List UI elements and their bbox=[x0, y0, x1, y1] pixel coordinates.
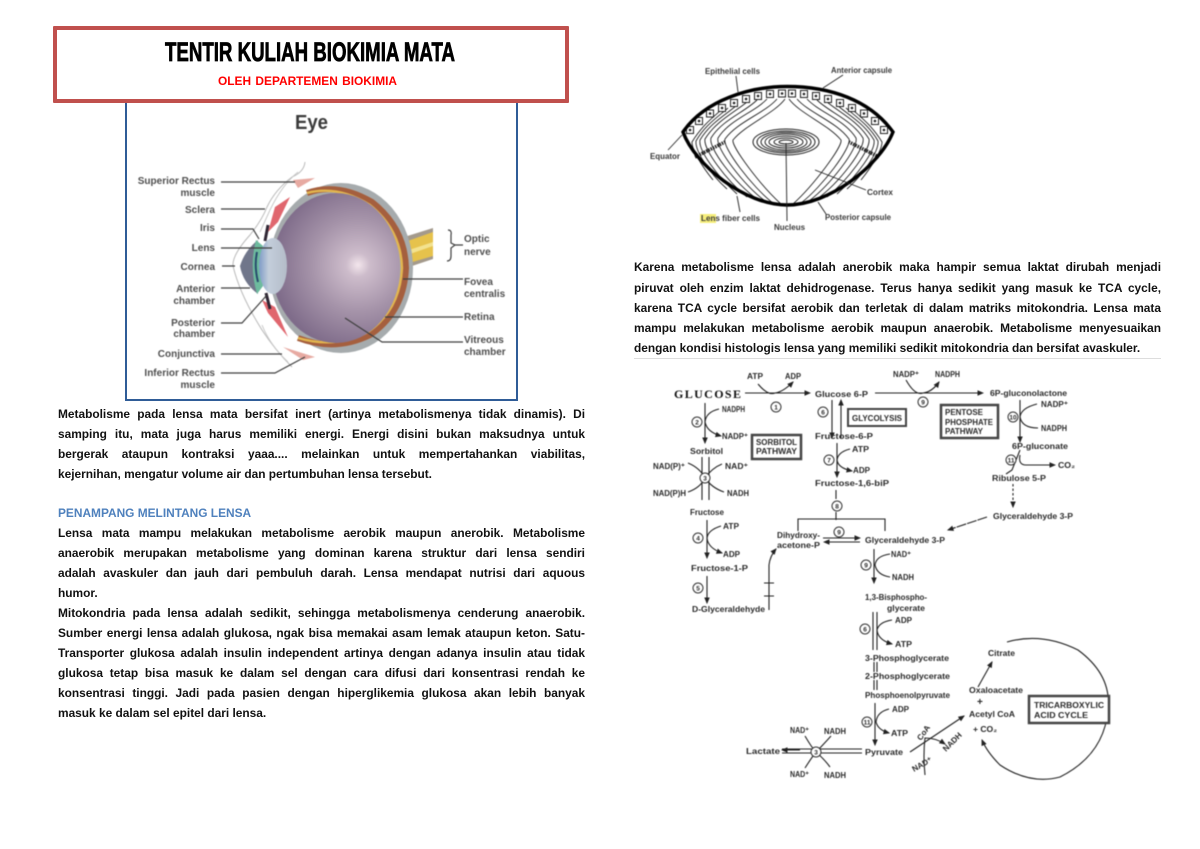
eyeball illustration bbox=[233, 162, 433, 367]
pyruvate to acetyl CoA labels bbox=[910, 723, 964, 774]
pathway step markers: 10 bbox=[1009, 414, 1017, 422]
glycolysis labels: ATP bbox=[747, 372, 764, 381]
lens cross-section diagram bbox=[650, 66, 896, 232]
pathway step markers: 6 bbox=[863, 626, 867, 634]
left text: lens metabolism: konsentrasi tinggi. Jadi pada pasien dengan hiperglikemia glukosa akan lebih banyak bbox=[58, 686, 585, 700]
eye right labels: nerve bbox=[464, 247, 491, 258]
glycolysis labels: acetone-P bbox=[777, 541, 821, 550]
sorbitol pathway labels: NADPH bbox=[722, 405, 745, 414]
glycolysis labels: NADH bbox=[892, 573, 914, 582]
lens labels: Equator bbox=[650, 152, 680, 161]
pentose phosphate labels: NADPH bbox=[935, 370, 960, 379]
pentose phosphate labels bbox=[893, 370, 1075, 521]
pyruvate to acetyl CoA labels: NADH bbox=[941, 731, 964, 753]
sorbitol pathway box bbox=[752, 435, 801, 459]
TCA cycle labels bbox=[969, 649, 1024, 734]
glycolysis labels: ATP bbox=[895, 640, 913, 649]
eye right labels: Retina bbox=[464, 312, 495, 323]
left text: lens metabolism: Transporter glukosa adalah insulin independent artinya dengan adanya insulin atau tidak bbox=[58, 646, 585, 660]
left text: metabolism intro: Metabolisme pada lensa mata bersifat inert (artinya metabolismenya tidak dinamis). Di bbox=[58, 407, 585, 421]
glycolysis labels: glycerate bbox=[887, 604, 926, 613]
TCA cycle labels: Oxaloacetate bbox=[969, 686, 1024, 695]
left text: metabolism intro: kejernihan, mengatur volume air dan pertumbuhan lensa tersebut. bbox=[58, 467, 432, 481]
glycolysis labels: NAD⁺ bbox=[790, 726, 809, 735]
eye left labels: chamber bbox=[173, 329, 215, 340]
left text: lens metabolism: Mitokondria pada lensa adalah sedikit, sehingga metabolismenya cenderung anaerobik. bbox=[58, 606, 585, 620]
pathway step markers: 9 bbox=[864, 562, 868, 570]
eye left labels: Inferior Rectus bbox=[144, 368, 215, 379]
pathway step markers bbox=[692, 397, 1018, 757]
left text: metabolism intro: bergerak ataupun kontraksi yaaa.... melainkan untuk mempertahankan viabilitas, bbox=[58, 447, 585, 461]
pentose phosphate labels: Glyceraldehyde 3-P bbox=[993, 512, 1074, 521]
glycolysis labels: ADP bbox=[895, 616, 913, 625]
glycolysis labels: Pyruvate bbox=[865, 748, 904, 757]
eye left labels bbox=[138, 176, 215, 391]
pathway step markers: 11 bbox=[1008, 458, 1015, 464]
sorbitol pathway labels: Fructose bbox=[690, 508, 725, 517]
sorbitol pathway labels: NAD(P)H bbox=[653, 489, 686, 498]
section heading: penampang melintang lensa: PENAMPANG MELINTANG LENSA bbox=[58, 506, 251, 520]
pentose phosphate pathway box: PHOSPHATE bbox=[945, 418, 994, 427]
glycolysis labels: 1,3-Bisphospho- bbox=[865, 593, 927, 602]
TCA cycle labels: + CO₂ bbox=[973, 725, 997, 734]
glycolysis labels: Glyceraldehyde 3-P bbox=[865, 536, 946, 545]
pyruvate to acetyl CoA labels: CoA bbox=[915, 723, 932, 742]
eye anatomy diagram bbox=[138, 112, 506, 391]
eye left labels: Lens bbox=[192, 243, 215, 254]
pentose phosphate labels: NADP⁺ bbox=[893, 370, 919, 379]
tricarboxylic acid cycle box: TRICARBOXYLIC bbox=[1034, 701, 1104, 710]
TCA cycle labels: + bbox=[977, 697, 983, 708]
glycolysis labels: ATP bbox=[852, 445, 870, 454]
pathway step markers: 8 bbox=[835, 504, 839, 510]
eye left labels: Superior Rectus bbox=[138, 176, 215, 187]
glycolysis labels: ADP bbox=[853, 466, 871, 475]
lens labels: Epithelial cells bbox=[705, 67, 761, 76]
lens capsule outline bbox=[683, 86, 893, 205]
subtitle: OLEH DEPARTEMEN BIOKIMIA bbox=[218, 74, 397, 88]
left text: lens metabolism: Sumber energi lensa adalah glukosa, ngak bisa memakai asam lemak ataupun keton. Satu- bbox=[58, 626, 585, 640]
glycolysis labels: GLUCOSE bbox=[674, 387, 741, 401]
TCA cycle labels: Acetyl CoA bbox=[969, 710, 1015, 719]
left text: lens metabolism: glukosa tetap bisa masuk ke dalam sel dengan cara difusi dari konsentrasi rendah ke bbox=[58, 666, 585, 680]
glycolysis labels bbox=[674, 372, 951, 780]
lens leader lines bbox=[668, 75, 866, 221]
pyruvate to acetyl CoA labels: NAD⁺ bbox=[910, 755, 934, 774]
sorbitol pathway box: PATHWAY bbox=[756, 447, 798, 456]
lens labels: Cortex bbox=[867, 188, 894, 197]
right text: anaerobic lens metabolism: dengan kondisi histologis lensa yang memiliki sedikit mitokondria dan bersifat avaskuler. bbox=[634, 341, 1140, 355]
pentose phosphate labels: NADPH bbox=[1041, 424, 1067, 433]
left text: lens metabolism: humor. bbox=[58, 586, 98, 600]
lens labels: Lens fiber cells bbox=[701, 214, 761, 223]
glycolysis labels: NADH bbox=[824, 771, 846, 780]
tricarboxylic acid cycle box: ACID CYCLE bbox=[1034, 711, 1089, 720]
pathway arrows and lines bbox=[688, 380, 1108, 779]
pathway step markers: 6 bbox=[821, 410, 825, 416]
glycolysis labels: Lactate bbox=[746, 747, 781, 756]
pathway step markers: 7 bbox=[827, 458, 831, 464]
pentose phosphate labels: 6P-gluconate bbox=[1012, 442, 1069, 451]
eye leader lines bbox=[221, 182, 463, 373]
eye left labels: Cornea bbox=[181, 262, 215, 273]
lens labels: Posterior capsule bbox=[825, 213, 892, 222]
pathway step markers: 5 bbox=[696, 586, 700, 592]
left text: lens metabolism bbox=[58, 526, 585, 720]
lens labels: Nucleus bbox=[774, 223, 806, 232]
pathway step markers: 3 bbox=[703, 476, 707, 482]
eye left labels: Anterior bbox=[176, 284, 215, 295]
right text: anaerobic lens metabolism: mampu melakukan metabolisme aerobik maupun anaerobik. Metabolisme menyesuaikan bbox=[634, 321, 1161, 335]
right text: anaerobic lens metabolism bbox=[634, 259, 1161, 359]
left text: lens metabolism: masuk ke dalam sel epitel dari lensa. bbox=[58, 706, 266, 720]
left text: lens metabolism: anaerobik merupakan metabolisme yang dominan karena struktur dari lensa sendiri bbox=[58, 546, 585, 560]
metabolic pathway diagram bbox=[652, 370, 1111, 781]
sorbitol pathway labels: D-Glyceraldehyde bbox=[692, 605, 766, 614]
sorbitol pathway labels: NADP⁺ bbox=[722, 432, 748, 441]
eye left labels: muscle bbox=[181, 188, 215, 199]
pathway step markers: 9 bbox=[921, 400, 925, 406]
eye left labels: Conjunctiva bbox=[158, 349, 215, 360]
glycolysis box bbox=[848, 409, 906, 426]
pentose phosphate labels: CO₂ bbox=[1058, 461, 1075, 470]
glycolysis labels: Glucose 6-P bbox=[815, 390, 869, 399]
glycolysis labels: 2-Phosphoglycerate bbox=[865, 672, 951, 681]
glycolysis labels: Fructose-1,6-biP bbox=[815, 479, 890, 488]
pathway step markers: 1 bbox=[774, 404, 778, 412]
right text: anaerobic lens metabolism: Karena metabolisme lensa adalah anerobik maka hampir semua laktat dirubah menjadi bbox=[634, 260, 1161, 274]
sorbitol pathway labels: ADP bbox=[723, 550, 741, 559]
sorbitol pathway labels: NAD(P)⁺ bbox=[653, 462, 685, 471]
sorbitol pathway labels: Fructose-1-P bbox=[691, 564, 749, 573]
pentose phosphate pathway box: PATHWAY bbox=[945, 427, 984, 436]
glycolysis labels: NADH bbox=[824, 727, 846, 736]
left text: metabolism intro: samping itu, mata juga harus memiliki energi. Energi disini bukan maksudnya untuk bbox=[58, 427, 585, 441]
pathway step markers: 9 bbox=[837, 530, 841, 536]
lens fibers and epithelial cells bbox=[686, 90, 888, 204]
eye left labels: chamber bbox=[173, 296, 215, 307]
sorbitol pathway labels: NADH bbox=[727, 489, 749, 498]
glycolysis labels: ATP bbox=[891, 729, 909, 738]
title box bbox=[53, 26, 569, 103]
eye right labels: Vitreous bbox=[464, 335, 504, 346]
pentose phosphate labels: 6P-gluconolactone bbox=[990, 389, 1068, 398]
pathway step markers: 4 bbox=[696, 536, 700, 542]
sorbitol pathway labels: NAD⁺ bbox=[725, 462, 748, 471]
glycolysis box: GLYCOLYSIS bbox=[852, 414, 903, 423]
eye right labels bbox=[464, 234, 506, 358]
eye heading: Eye bbox=[295, 112, 328, 134]
glycolysis labels: Fructose-6-P bbox=[815, 432, 874, 441]
sorbitol pathway labels: Sorbitol bbox=[690, 447, 723, 456]
pathway step markers: 3 bbox=[814, 750, 818, 756]
sorbitol pathway labels bbox=[653, 405, 766, 614]
glycolysis labels: NAD⁺ bbox=[891, 550, 911, 559]
eye right labels: Fovea bbox=[464, 277, 493, 288]
lens highlight bbox=[700, 214, 716, 223]
left text: lens metabolism: adalah avaskuler dan jauh dari pembuluh darah. Lensa mendapat nutrisi dari aquous bbox=[58, 566, 585, 580]
eye right labels: Optic bbox=[464, 234, 490, 245]
left text: metabolism intro bbox=[58, 407, 585, 481]
pathway step markers: 2 bbox=[695, 420, 699, 426]
lens nucleus bbox=[753, 129, 819, 155]
glycolysis labels: ADP bbox=[892, 705, 910, 714]
sorbitol pathway box: SORBITOL bbox=[756, 438, 797, 447]
eye right labels: centralis bbox=[464, 289, 506, 300]
eye right labels: chamber bbox=[464, 347, 506, 358]
eye left labels: Posterior bbox=[171, 318, 215, 329]
pentose phosphate pathway box bbox=[941, 405, 998, 438]
eye left labels: muscle bbox=[181, 380, 215, 391]
pentose phosphate labels: NADP⁺ bbox=[1041, 400, 1068, 409]
lens labels bbox=[650, 66, 894, 232]
pentose phosphate pathway box: PENTOSE bbox=[945, 408, 984, 417]
tricarboxylic acid cycle box bbox=[1029, 696, 1109, 723]
glycolysis labels: Phosphoenolpyruvate bbox=[865, 691, 951, 700]
glycolysis labels: ADP bbox=[785, 372, 802, 381]
eye diagram frame bbox=[125, 90, 518, 401]
right text: anaerobic lens metabolism: piruvat oleh enzim laktat dehidrogenase. Terus hanya sedikit yang masuk ke TCA cycle, bbox=[634, 281, 1161, 295]
right text: anaerobic lens metabolism: karena TCA cycle bersifat aerobik dan terletak di dalam matriks mitokondria. Lensa mata bbox=[634, 301, 1161, 315]
eye left labels: Iris bbox=[200, 223, 215, 234]
pathway step markers: 11 bbox=[864, 720, 871, 726]
glycolysis labels: 3-Phosphoglycerate bbox=[865, 654, 950, 663]
TCA cycle labels: Citrate bbox=[988, 649, 1016, 658]
pentose phosphate labels: Ribulose 5-P bbox=[992, 474, 1047, 483]
glycolysis labels: NAD⁺ bbox=[790, 770, 809, 779]
eye left labels: Sclera bbox=[185, 205, 215, 216]
left text: lens metabolism: Lensa mata mampu melakukan metabolisme aerobik maupun anerobik. Metabolisme bbox=[58, 526, 585, 540]
lens labels: Anterior capsule bbox=[831, 66, 893, 75]
sorbitol pathway labels: ATP bbox=[723, 522, 740, 531]
glycolysis labels: Dihydroxy- bbox=[777, 531, 820, 540]
